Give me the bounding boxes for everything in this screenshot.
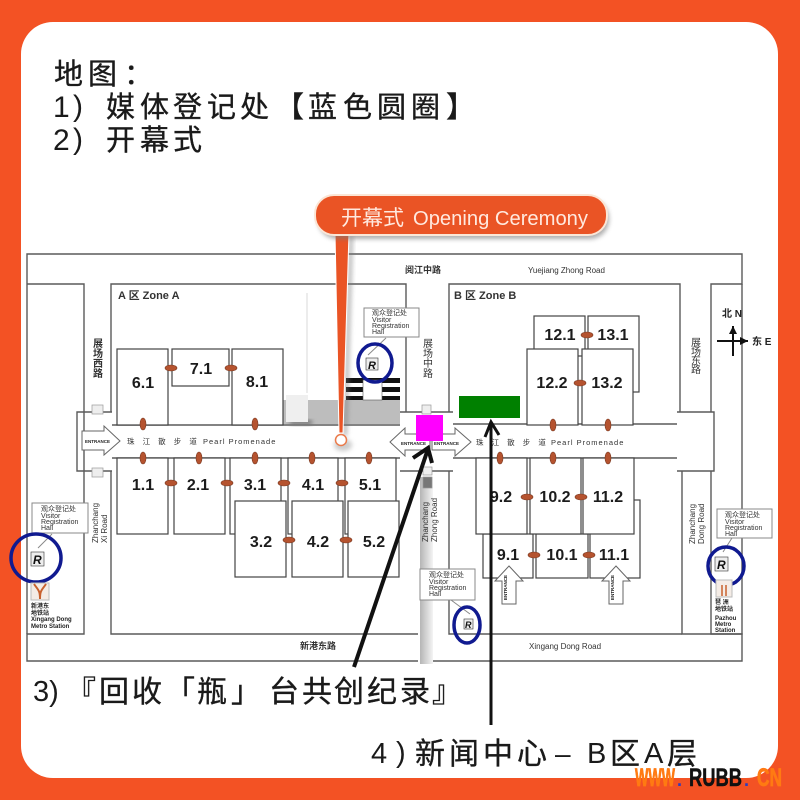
road and zone labels: B 区 Zone B <box>454 289 516 302</box>
halls zone A <box>117 349 399 577</box>
title text block: ) <box>73 90 83 123</box>
road and zone labels: Pearl Promenade <box>551 438 624 447</box>
registration callout: east: Hall <box>725 531 738 538</box>
label 4: – <box>555 738 571 769</box>
metro: Pazhou: Metro <box>715 622 732 628</box>
title text block: 2 <box>53 124 70 157</box>
entrance labels: ENTRANCE <box>610 575 615 600</box>
registration callout: south centre: 观众登记处 <box>429 570 464 579</box>
metro: Pazhou: Station <box>715 628 736 634</box>
road and zone labels: 东 <box>691 354 701 367</box>
metro: Xingang Dong <box>31 583 72 630</box>
road and zone labels: A 区 Zone A <box>118 289 180 302</box>
registration callout: zone A top <box>358 308 419 382</box>
compass: 北 N <box>722 308 742 320</box>
road and zone labels: Xingang Dong Road <box>529 642 601 651</box>
watermark: . <box>744 770 749 790</box>
halls zone B: 11.2 <box>593 489 623 506</box>
title text block: 地图 <box>54 58 117 91</box>
halls zone B: 11.1 <box>599 547 629 564</box>
watermark <box>635 764 782 792</box>
halls zone B: 9.2 <box>490 489 512 506</box>
grey shaded walkway <box>283 400 400 424</box>
halls zone B: 13.2 <box>591 375 623 392</box>
metro: Xingang Dong: Xingang Dong <box>31 617 72 623</box>
opening ceremony callout with pointer <box>315 195 609 451</box>
label 4: A <box>644 738 664 770</box>
small gate icons <box>92 405 432 488</box>
halls zone A: 7.1 <box>190 361 212 378</box>
registration callout: south centre: Visitor <box>429 579 449 586</box>
halls zone A: 2.1 <box>187 477 209 494</box>
road and zone labels: 路 <box>691 363 701 376</box>
green marker <box>459 396 520 418</box>
label 3: 3) <box>33 676 59 708</box>
title text block <box>53 58 475 157</box>
registration callout: east: Registration <box>725 525 762 532</box>
arrow: recycling platform <box>354 448 432 667</box>
road and zone labels: 展 <box>691 337 701 349</box>
halls zone A: 3.1 <box>244 477 266 494</box>
label 3: 『回收「瓶」台共创纪录』 <box>66 676 462 709</box>
road and zone labels: Zhanchang <box>421 502 430 542</box>
metro: Xingang Dong: 地铁站 <box>31 609 49 617</box>
label 4: 区 <box>610 738 640 771</box>
halls zone B: 13.1 <box>597 327 629 344</box>
watermark: . <box>677 770 682 790</box>
road and zone labels: Zhong Road <box>430 498 439 542</box>
label 4: ) <box>396 737 406 769</box>
road and zone labels <box>91 264 706 651</box>
road and zone labels: Xi Road <box>100 515 109 543</box>
registration callout: west <box>11 503 88 582</box>
registration callout: west: R <box>33 553 42 567</box>
road and zone labels: 珠 江 散 步 道 <box>127 436 200 446</box>
metro: Xingang Dong: 新港东 <box>31 602 49 610</box>
halls zone B: 9.1 <box>497 547 519 564</box>
registration callout: west: Registration <box>41 519 78 526</box>
watermark: RUBB <box>689 764 742 792</box>
road outlines <box>27 254 742 661</box>
halls zone A: 1.1 <box>132 477 154 494</box>
road and zone labels: 珠 江 散 步 道 <box>476 437 549 447</box>
title text block: 媒体登记处【蓝色圆圈】 <box>106 91 475 124</box>
road and zone labels: 展 <box>423 338 433 350</box>
road and zone labels: 路 <box>93 367 103 380</box>
venue map <box>11 254 772 664</box>
halls zone B: 12.1 <box>544 327 576 344</box>
title text block: 开幕式 <box>106 124 202 157</box>
compass <box>717 308 772 356</box>
metro: Pazhou: Pazhou <box>715 616 737 622</box>
hall connector arrows <box>140 332 611 558</box>
label 4 <box>371 737 697 771</box>
entrance labels <box>85 439 615 600</box>
road and zone labels: 场 <box>691 345 701 358</box>
title text block: 1 <box>53 91 70 124</box>
grey road shadow <box>420 477 433 664</box>
road and zone labels: 中 <box>423 357 433 370</box>
registration callout: zone A top: Visitor <box>372 317 392 324</box>
entrance labels: ENTRANCE <box>503 575 508 600</box>
halls zone A: 6.1 <box>132 375 154 392</box>
registration callout: east: R <box>717 558 726 572</box>
entrance labels: ENTRANCE <box>85 439 110 444</box>
registration callout: zone A top: 观众登记处 <box>372 308 407 317</box>
metro: Pazhou: 地铁站 <box>715 605 733 613</box>
registration callout: east <box>708 509 772 585</box>
registration callout: west: Visitor <box>41 513 61 520</box>
registration callout: east: Visitor <box>725 519 745 526</box>
registration callout: south centre: R <box>465 620 472 630</box>
registration callout: zone A top: R <box>368 360 376 372</box>
road and zone labels: Pearl Promenade <box>203 437 276 446</box>
opening ceremony callout with pointer: Opening Ceremony <box>413 208 588 230</box>
registration callout: south centre <box>420 569 480 643</box>
title text block: ： <box>124 59 153 91</box>
compass: 东 E <box>752 335 772 348</box>
road and zone labels: 阅江中路 <box>405 264 441 275</box>
entrance labels: ENTRANCE <box>434 441 459 446</box>
halls zone B: 12.2 <box>536 375 568 392</box>
road and zone labels: 场 <box>93 347 103 360</box>
road and zone labels: 新港东路 <box>300 640 336 651</box>
registration callout: west: Hall <box>41 525 54 532</box>
label 4: 4 <box>371 738 387 770</box>
road and zone labels: Zhanchang <box>91 503 100 543</box>
halls zone B: 10.2 <box>539 489 571 506</box>
label 4: B <box>587 738 606 770</box>
title text block: ) <box>73 123 83 156</box>
road and zone labels: Yuejiang Zhong Road <box>528 266 605 275</box>
opening ceremony callout with pointer: 开幕式 <box>341 207 404 230</box>
road and zone labels: Dong Road <box>697 504 706 544</box>
halls zone A: 3.2 <box>250 534 272 551</box>
entrance arrows <box>82 426 630 604</box>
registration callout: zone A top: Hall <box>372 329 385 336</box>
halls zone A: 8.1 <box>246 374 268 391</box>
label 4: 层 <box>667 738 697 771</box>
halls zone B: 10.1 <box>546 547 578 564</box>
road and zone labels: 西 <box>93 358 103 370</box>
label 4: 新闻中心 <box>415 738 547 771</box>
road and zone labels: 展 <box>93 338 103 350</box>
halls zone B <box>476 316 640 578</box>
metro: Pazhou <box>715 580 737 634</box>
watermark: WWW <box>635 764 675 792</box>
metro: Pazhou: 琶 洲 <box>715 599 729 606</box>
registration callout: west: 观众登记处 <box>41 504 76 513</box>
arrow: press centre <box>485 422 499 725</box>
halls zone A: 5.2 <box>363 534 385 551</box>
watermark: CN <box>757 764 782 792</box>
road and zone labels: 场 <box>423 347 433 360</box>
metro: Xingang Dong: Metro Station <box>31 624 70 630</box>
entrance labels: ENTRANCE <box>401 441 426 446</box>
road and zone labels: 路 <box>423 367 433 380</box>
registration callout: south centre: Hall <box>429 591 442 598</box>
halls zone A: 4.1 <box>302 477 324 494</box>
road and zone labels: Zhanchang <box>688 504 697 544</box>
registration callout: zone A top: Registration <box>372 323 409 330</box>
registration callout: east: 观众登记处 <box>725 510 760 519</box>
halls zone A: 5.1 <box>359 477 381 494</box>
halls zone A: 4.2 <box>307 534 329 551</box>
black striped stairs <box>346 378 400 400</box>
magenta marker <box>416 415 443 441</box>
registration callout: south centre: Registration <box>429 585 466 592</box>
